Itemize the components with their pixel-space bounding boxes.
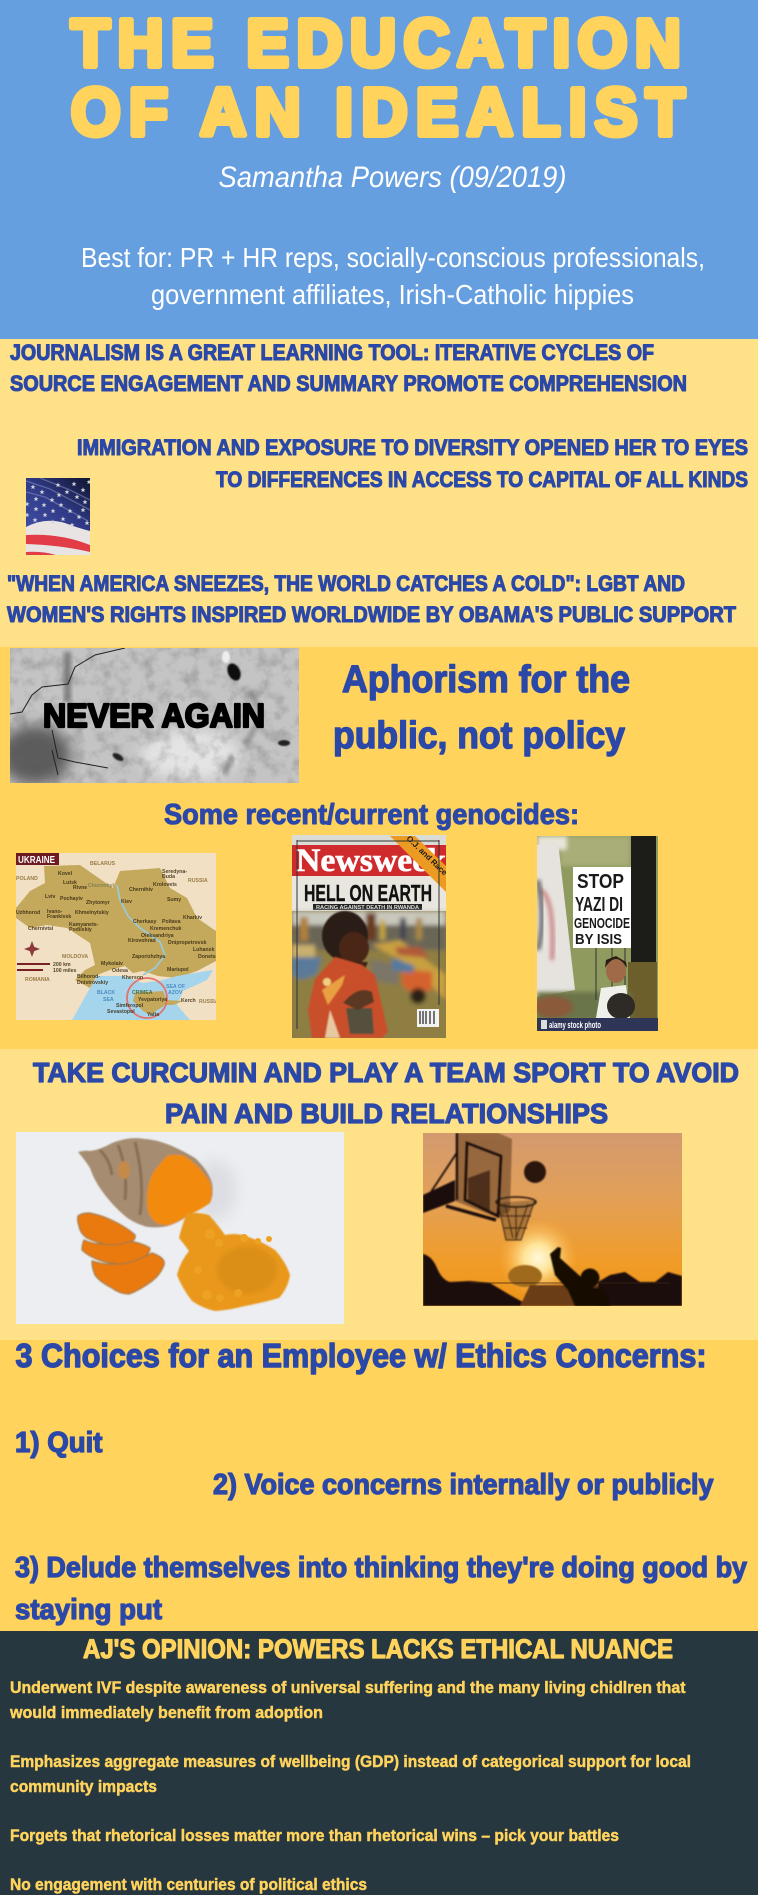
image: map of Ukraine: Odesa xyxy=(112,968,128,974)
image: map of Ukraine: Kirovohrad xyxy=(128,938,156,944)
image: map of Ukraine: Mykolaiv xyxy=(101,961,123,967)
critique: IVF xyxy=(9,1678,686,1722)
image: map of Ukraine: RUSSIA xyxy=(188,878,208,884)
immigration takeaway xyxy=(77,435,748,492)
icon: American flag xyxy=(24,478,92,555)
image: Stop Yazidi genocide protest sign xyxy=(533,836,658,1031)
sign lettering: STOP xyxy=(577,871,624,893)
image: map of Ukraine: 100 miles xyxy=(53,968,76,974)
audience note: government affiliates, Irish-Catholic hippies xyxy=(151,279,634,310)
image: map of Ukraine: Lutsk xyxy=(63,880,77,886)
heading: aphorism for the public: public, not policy xyxy=(333,715,625,757)
image: map of Ukraine: Zhytomyr xyxy=(86,900,110,906)
image: map of Ukraine: ROMANIA xyxy=(25,977,50,983)
image: map of Ukraine: Kovel xyxy=(58,871,73,877)
image: map of Ukraine: Sumy xyxy=(167,897,181,903)
image: map of Ukraine: Donetsk xyxy=(198,954,219,960)
treeline xyxy=(423,1254,682,1306)
image: map of Ukraine: Poltava xyxy=(162,919,181,925)
critique: political ethics: No engagement with centuries of political ethics xyxy=(10,1875,367,1894)
critique: IVF: Underwent IVF despite awareness of universal suffering and the many living chidlren that xyxy=(10,1678,686,1697)
image: map of Ukraine: Seredyna- xyxy=(162,869,187,875)
image: map of Ukraine: Oleksandriya xyxy=(141,933,174,939)
heading: aphorism for the public xyxy=(333,659,630,757)
critique: IVF: would immediately benefit from adoption xyxy=(9,1703,323,1722)
image: map of Ukraine: Chernivtsi xyxy=(28,926,54,932)
title: OF AN IDEALIST xyxy=(71,75,685,149)
image: map of Ukraine: 200 km xyxy=(53,962,71,968)
image: map of Ukraine: Yevpatoriya xyxy=(138,997,167,1003)
image: map of Ukraine: Kiev xyxy=(121,899,132,905)
journalism takeaway: JOURNALISM IS A GREAT LEARNING TOOL: ITERATIVE CYCLES OF xyxy=(10,340,654,365)
image: map of Ukraine: Kherson xyxy=(122,975,143,981)
sign lettering xyxy=(574,871,630,948)
image: map of Ukraine: SEA xyxy=(103,997,114,1003)
image: map of Ukraine: Kerch xyxy=(181,998,196,1004)
image: map of Ukraine: Cherkasy xyxy=(133,919,156,925)
image: map of Ukraine: Yalta xyxy=(147,1012,159,1018)
panel: three choices for an employee xyxy=(0,1337,758,1631)
heading: three choices: 3 Choices for an Employee w/ Ethics Concerns: xyxy=(16,1337,706,1374)
journalism takeaway xyxy=(10,340,687,396)
title: THE EDUCATION xyxy=(71,6,681,80)
heading: AJ's opinion: AJ'S OPINION: POWERS LACKS ETHICAL NUANCE xyxy=(83,1634,673,1664)
image: Newsweek cover, Hell on Earth: Newsweek xyxy=(296,843,447,879)
image: map of Ukraine: BLACK xyxy=(97,990,115,996)
choice 2: voice concerns: 2) Voice concerns internally or publicly xyxy=(213,1469,714,1501)
image: map of Ukraine: Luhansk xyxy=(193,947,214,953)
image: map of Ukraine: Khmelnytskiy xyxy=(75,910,109,916)
panel: AJ's opinion xyxy=(0,1631,758,1895)
critique: aggregate measures: Emphasizes aggregate measures of wellbeing (GDP) instead of categorical support for local xyxy=(10,1752,691,1771)
America's influence takeaway xyxy=(7,571,737,627)
heading: curcumin and team sport: PAIN AND BUILD RELATIONSHIPS xyxy=(165,1098,608,1129)
image: map of Ukraine: Sevastopol xyxy=(107,1009,135,1015)
image: map of Ukraine: Chornobyl xyxy=(88,883,114,889)
image: map of Ukraine: Dnistrovskiy xyxy=(77,980,108,986)
image: map of Ukraine: Chernihiv xyxy=(129,887,153,893)
image: map of Ukraine: Pochayiv xyxy=(60,896,83,902)
image: map of Ukraine: CRIMEA xyxy=(132,990,153,996)
critique: rhetorical losses: Forgets that rhetorical losses matter more than rhetorical wins – pick your battles xyxy=(10,1826,619,1845)
image: map of Ukraine: Krolovets xyxy=(153,882,177,888)
choice 1: quit: 1) Quit xyxy=(15,1427,103,1459)
panel: never again and genocides xyxy=(10,648,658,1038)
sign lettering: BY ISIS xyxy=(575,931,622,948)
choice 3: delude themselves xyxy=(15,1552,747,1626)
image: map of Ukraine: Kremenchuk xyxy=(150,926,182,932)
image: map of Ukraine: BELARUS xyxy=(90,861,116,867)
image: map of Ukraine: Dnipropetrovsk xyxy=(168,940,206,946)
image: Newsweek cover, Hell on Earth xyxy=(292,834,449,1038)
heading: aphorism for the public: Aphorism for the xyxy=(342,659,630,701)
sign lettering: YAZI DI xyxy=(575,894,623,916)
player silhouette xyxy=(550,1247,610,1306)
turmeric powder xyxy=(177,1213,290,1311)
image: map of Ukraine: Podilskiy xyxy=(69,927,92,933)
image: map of Ukraine: Kharkiv xyxy=(183,915,202,921)
panel: header xyxy=(0,0,758,339)
child xyxy=(308,911,388,1038)
image: map of Ukraine: Zaporizhzhya xyxy=(132,954,165,960)
sign lettering: GENOCIDE xyxy=(574,915,630,932)
image: map of Ukraine: Lviv xyxy=(45,894,55,900)
photo: never again on cracked wall xyxy=(0,648,299,785)
heading: curcumin and team sport xyxy=(33,1057,739,1129)
image: map of Ukraine: UKRAINE xyxy=(18,855,55,866)
image: map of Ukraine: RUSSIA xyxy=(199,999,219,1005)
turmeric root xyxy=(78,1138,213,1227)
heading: recent genocides: Some recent/current genocides: xyxy=(164,799,579,831)
turmeric slices xyxy=(78,1213,164,1294)
image: map of Ukraine: MOLDOVA xyxy=(62,954,88,960)
image: map of Ukraine: Mariupol xyxy=(167,967,189,973)
image: Newsweek cover, Hell on Earth: O.J. and Race xyxy=(405,834,449,878)
title xyxy=(71,6,685,149)
author and date: Samantha Powers (09/2019) xyxy=(218,161,566,194)
image: Newsweek cover, Hell on Earth: RACING AGAINST DEATH IN RWANDA xyxy=(316,905,419,911)
image: map of Ukraine: Rivne xyxy=(73,885,87,891)
image: map of Ukraine: Ivano- xyxy=(47,909,63,915)
image: map of Ukraine: Buda xyxy=(162,874,175,880)
critique: aggregate measures: community impacts xyxy=(10,1777,157,1796)
image: map of Ukraine: Frankivsk xyxy=(47,914,71,920)
photo: basketball at sunset xyxy=(423,1133,682,1306)
image: map of Ukraine: AZOV xyxy=(168,990,183,996)
never again lettering: NEVER AGAIN xyxy=(43,697,265,734)
choice 3: delude themselves: staying put xyxy=(15,1594,162,1626)
image: map of Ukraine: SEA OF xyxy=(166,984,185,990)
image: map of Ukraine xyxy=(16,853,219,1020)
panel: curcumin and team sport xyxy=(0,1049,758,1340)
backboard and hoop xyxy=(423,1133,546,1240)
heading: curcumin and team sport: TAKE CURCUMIN AND PLAY A TEAM SPORT TO AVOID xyxy=(33,1057,739,1088)
panel: journalism, immigration and America xyxy=(0,339,758,647)
image: map of Ukraine: Uzhhorod xyxy=(16,910,40,916)
image: Stop Yazidi genocide protest sign: alamy stock photo xyxy=(549,1020,601,1031)
audience note xyxy=(81,242,705,310)
image: map of Ukraine: Kamyanets- xyxy=(69,922,99,928)
journalism takeaway: SOURCE ENGAGEMENT AND SUMMARY PROMOTE COMPREHENSION xyxy=(10,371,687,396)
cover headline: HELL ON EARTH xyxy=(304,880,432,906)
image: map of Ukraine: POLAND xyxy=(16,876,38,882)
image: map of Ukraine: Bilhorod- xyxy=(77,974,100,980)
critique: aggregate measures xyxy=(10,1752,691,1796)
image: map of Ukraine: Simferopol xyxy=(116,1003,144,1009)
photo: turmeric root and powder xyxy=(16,1132,344,1324)
